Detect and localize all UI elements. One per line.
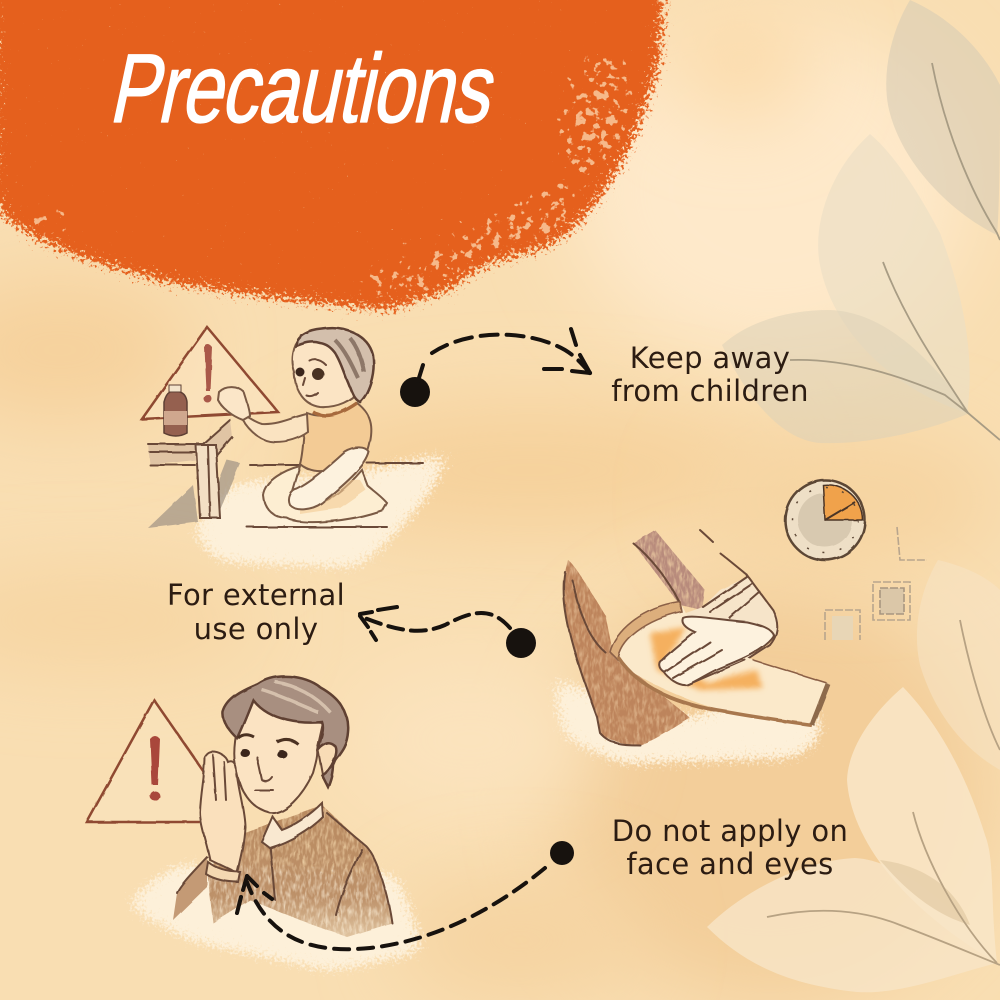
text: do not apply on face and eyes: Do not apply on: [612, 814, 848, 848]
collar: [262, 803, 323, 848]
text: keep away from children: Keep away: [630, 341, 790, 375]
body: [300, 403, 371, 472]
text: for external use only: use only: [194, 612, 318, 646]
sleeve: [173, 857, 207, 920]
panel: do not apply on face illustration: [87, 676, 430, 975]
face: [234, 700, 323, 813]
white paint patch: [115, 860, 430, 975]
resting arm: [289, 448, 369, 509]
man: [173, 676, 392, 937]
orange paint splash: [0, 0, 668, 312]
text: do not apply on face and eyes: face and eyes: [626, 847, 834, 881]
icon: medicine bottle: [164, 385, 187, 436]
white paint patch: [545, 665, 830, 768]
panel: keep away from children illustration: [142, 327, 462, 572]
arrow: to for external use only: [360, 607, 536, 658]
text: keep away from children: from children: [611, 374, 809, 408]
head: [292, 338, 358, 407]
icon: warning triangle: [87, 700, 204, 822]
icon: clock: [785, 480, 865, 560]
title: Precautions: [104, 33, 507, 143]
decorative leaves bottom right: [707, 560, 1000, 992]
arrow: to keep away from children: [400, 329, 590, 407]
torso: [207, 805, 392, 937]
hand: [218, 387, 250, 420]
decorative leaves top right: [722, 0, 1000, 443]
legs: [263, 466, 387, 522]
arm, cloth and hand: [564, 530, 829, 745]
reaching arm: [243, 414, 308, 442]
hand: [200, 752, 245, 873]
dashed squares: [825, 527, 927, 640]
white paint patch: [185, 445, 462, 572]
arrow: to do not apply on face and eyes: [237, 841, 574, 949]
text: for external use only: For external: [167, 578, 345, 612]
icon: warning triangle: [142, 327, 278, 419]
panel: for external use only illustration: [545, 480, 927, 768]
hair: [223, 676, 348, 787]
child: [218, 328, 387, 522]
table: [148, 420, 423, 528]
